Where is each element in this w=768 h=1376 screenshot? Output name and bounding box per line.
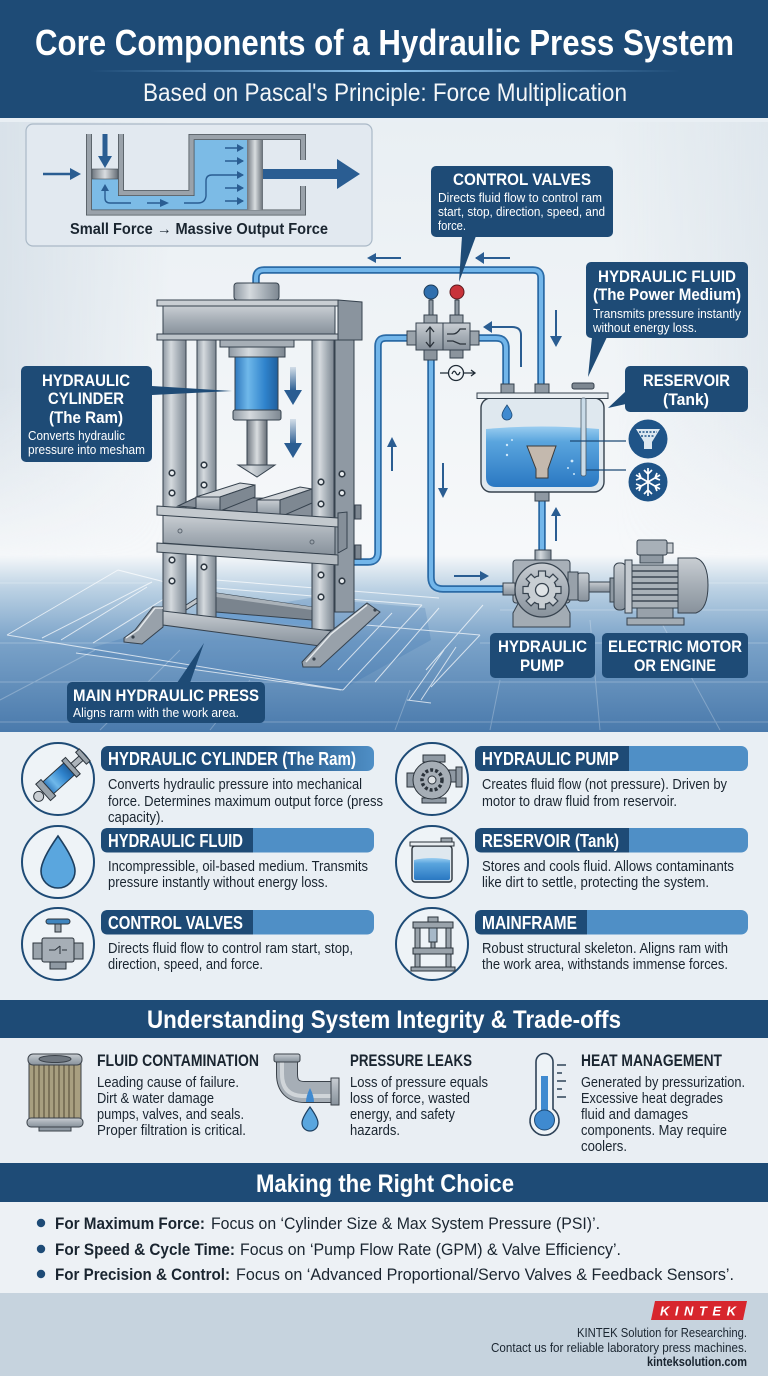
icon: thermometer bbox=[530, 1054, 566, 1135]
rear rail bbox=[216, 612, 312, 626]
callout: hydraulic fluid: Transmits pressure instantly bbox=[593, 306, 741, 321]
item: fluid contamination: Proper filtration is critical. bbox=[97, 1123, 246, 1139]
item: fluid contamination: Leading cause of failure. bbox=[97, 1075, 239, 1091]
card: hydraulic pump: motor to draw fluid from reservoir. bbox=[482, 794, 677, 810]
column holes bbox=[169, 462, 345, 600]
base and feet bbox=[163, 611, 332, 646]
card: reservoir bbox=[396, 826, 748, 898]
label: electric motor: ELECTRIC MOTOR bbox=[608, 637, 742, 656]
card: mainframe: Robust structural skeleton. Aligns ram with bbox=[482, 941, 728, 957]
footer text: KINTEK Solution for Researching. bbox=[577, 1326, 747, 1340]
card: mainframe bbox=[396, 908, 748, 980]
header banner bbox=[0, 0, 768, 118]
callout: hydraulic cylinder bbox=[21, 366, 232, 462]
item: pressure leaks: Loss of pressure equals bbox=[350, 1075, 488, 1091]
card: hydraulic cylinder: force. Determines maximum output force (press bbox=[108, 794, 383, 810]
card: hydraulic fluid bbox=[22, 826, 374, 898]
hydraulic press frame bbox=[124, 283, 380, 667]
card: hydraulic fluid: HYDRAULIC FLUID bbox=[108, 831, 243, 851]
icon: tank bbox=[410, 838, 454, 882]
card: reservoir: RESERVOIR (Tank) bbox=[482, 831, 619, 851]
top beam bbox=[234, 283, 279, 300]
item: pressure leaks: energy, and safety bbox=[350, 1107, 456, 1123]
footer text: kinteksolution.com bbox=[647, 1355, 747, 1369]
icon: cylinder bbox=[28, 747, 92, 808]
callout: control valves bbox=[431, 166, 613, 282]
press bed top surface bbox=[178, 497, 312, 518]
section band: system integrity bbox=[0, 1000, 768, 1038]
card: hydraulic pump: Creates fluid flow (not pressure). Driven by bbox=[482, 777, 728, 793]
hydraulic pump bbox=[503, 550, 589, 627]
panel: trade-offs bbox=[0, 1038, 768, 1163]
reservoir tank bbox=[477, 383, 668, 502]
callout: reservoir: (Tank) bbox=[663, 390, 709, 409]
icon: pump bbox=[407, 755, 462, 803]
footer text bbox=[491, 1326, 747, 1369]
card: hydraulic pump: HYDRAULIC PUMP bbox=[482, 749, 619, 769]
logo: KINTEK: KINTEK bbox=[660, 1304, 738, 1318]
bullet: precision and control bbox=[37, 1265, 734, 1284]
card: control valves: direction, speed, and force. bbox=[108, 957, 263, 973]
item: heat management bbox=[530, 1052, 745, 1155]
icon: leaking pipe bbox=[274, 1054, 339, 1131]
pipes bbox=[256, 270, 542, 589]
bullet: maximum force: Focus on ‘Cylinder Size & Max System Pressure (PSI)’. bbox=[211, 1214, 600, 1233]
card: hydraulic fluid: Incompressible, oil-based medium. Transmits bbox=[108, 859, 368, 875]
press bed bbox=[355, 505, 361, 519]
item: heat management: Generated by pressurization. bbox=[581, 1075, 745, 1091]
callout: hydraulic fluid: HYDRAULIC FLUID bbox=[598, 267, 736, 286]
blueprint floor bbox=[0, 570, 768, 730]
card: control valves bbox=[22, 908, 374, 980]
item: heat management: components. May require bbox=[581, 1123, 727, 1139]
callout: hydraulic cylinder: Converts hydraulic bbox=[28, 428, 125, 443]
card: control valves: CONTROL VALVES bbox=[108, 913, 243, 933]
flow arrows bbox=[105, 148, 243, 203]
callout: main hydraulic press: Aligns rarm with the work area. bbox=[73, 705, 239, 720]
input arrows bbox=[43, 173, 72, 175]
logo: KINTEK bbox=[651, 1301, 747, 1320]
card: hydraulic cylinder: Converts hydraulic pressure into mechanical bbox=[108, 777, 362, 793]
callout: hydraulic cylinder: CYLINDER bbox=[48, 389, 124, 408]
footer text: Contact us for reliable laboratory press machines. bbox=[491, 1341, 747, 1355]
callout: hydraulic fluid: (The Power Medium) bbox=[593, 285, 741, 304]
card: hydraulic pump bbox=[396, 743, 748, 815]
callout: hydraulic fluid bbox=[586, 262, 748, 377]
label: hydraulic pump: PUMP bbox=[520, 656, 564, 675]
item: pressure leaks: loss of force, wasted bbox=[350, 1091, 470, 1107]
card: hydraulic cylinder: capacity). bbox=[108, 810, 164, 826]
columns bbox=[197, 340, 216, 618]
item: pressure leaks: hazards. bbox=[350, 1123, 400, 1139]
hydraulic cylinder bbox=[220, 340, 294, 477]
card: hydraulic fluid: pressure instantly without energy loss. bbox=[108, 875, 328, 891]
diagram caption: Small Force → Massive Output Force bbox=[70, 221, 328, 238]
callout: main hydraulic press: MAIN HYDRAULIC PRESS bbox=[73, 686, 259, 705]
valve manifold bbox=[407, 285, 479, 380]
icon: frame bbox=[411, 917, 455, 971]
label: hydraulic pump: HYDRAULIC bbox=[498, 637, 587, 656]
ram direction arrows bbox=[284, 367, 302, 458]
flow symbol bbox=[440, 366, 475, 380]
section band: system integrity: Understanding System Integrity & Trade-offs bbox=[147, 1006, 621, 1034]
callout: hydraulic cylinder: HYDRAULIC bbox=[42, 371, 130, 390]
work blocks bbox=[196, 483, 312, 517]
icon: filter bbox=[628, 420, 668, 458]
callout: control valves: Directs fluid flow to control ram bbox=[438, 190, 602, 205]
callout: main hydraulic press bbox=[67, 643, 265, 723]
panel: right choice list bbox=[0, 1202, 768, 1293]
icon: snowflake bbox=[628, 462, 668, 502]
label: electric motor bbox=[602, 633, 748, 678]
icon: drop bbox=[41, 836, 75, 888]
card: hydraulic cylinder: HYDRAULIC CYLINDER (The Ram) bbox=[108, 749, 356, 769]
card: control valves: Directs fluid flow to control ram start, stop, bbox=[108, 941, 353, 957]
item: pressure leaks bbox=[274, 1052, 488, 1139]
leader lines bbox=[570, 441, 626, 470]
subtitle: Based on Pascal's Principle: Force Multiplication bbox=[143, 79, 627, 107]
item: fluid contamination: FLUID CONTAMINATION bbox=[97, 1052, 259, 1070]
card: mainframe: the work area, withstands immense forces. bbox=[482, 957, 728, 973]
item: fluid contamination bbox=[27, 1052, 259, 1139]
panel: component cards bbox=[0, 732, 768, 1000]
item: heat management: coolers. bbox=[581, 1139, 627, 1155]
pump gear bbox=[523, 571, 561, 609]
section band: right choice bbox=[0, 1163, 768, 1202]
callout: control valves: force. bbox=[438, 218, 466, 233]
footer bbox=[0, 1293, 768, 1376]
card: hydraulic cylinder bbox=[22, 743, 383, 826]
item: fluid contamination: pumps, valves, and seals. bbox=[97, 1107, 244, 1123]
card: reservoir: Stores and cools fluid. Allows contaminants bbox=[482, 859, 734, 875]
section band: right choice: Making the Right Choice bbox=[256, 1170, 514, 1198]
panel: main system diagram bbox=[0, 122, 768, 732]
callout: hydraulic cylinder: pressure into mesham bbox=[28, 442, 145, 457]
icon: filter cartridge bbox=[27, 1054, 83, 1131]
callout: hydraulic cylinder: (The Ram) bbox=[49, 408, 123, 427]
item: fluid contamination: Dirt & water damage bbox=[97, 1091, 214, 1107]
icon: valve bbox=[33, 919, 83, 969]
callout: reservoir bbox=[608, 366, 748, 412]
item: heat management: fluid and damages bbox=[581, 1107, 688, 1123]
bullet: precision and control: For Precision & Control: bbox=[55, 1265, 230, 1284]
label: hydraulic pump bbox=[490, 633, 595, 678]
drop bbox=[502, 405, 512, 420]
electric motor bbox=[589, 540, 708, 625]
internal strainer bbox=[527, 446, 556, 478]
bullet: maximum force: For Maximum Force: bbox=[55, 1214, 205, 1233]
card: mainframe: MAINFRAME bbox=[482, 913, 577, 933]
bullet: speed and cycle time: For Speed & Cycle Time: bbox=[55, 1240, 235, 1259]
callout: control valves: start, stop, direction, speed, and bbox=[438, 204, 605, 219]
panel: Pascal principle diagram bbox=[26, 124, 372, 246]
card: reservoir: like dirt to settle, protecting the system. bbox=[482, 875, 709, 891]
label: electric motor: OR ENGINE bbox=[634, 656, 716, 675]
callout: control valves: CONTROL VALVES bbox=[453, 170, 591, 189]
callout: reservoir: RESERVOIR bbox=[643, 371, 730, 390]
bullet: precision and control: Focus on ‘Advanced Proportional/Servo Valves & Feedback Sensors’. bbox=[236, 1265, 734, 1284]
fluid bbox=[92, 140, 248, 210]
vessel walls bbox=[89, 134, 303, 212]
small piston bbox=[92, 169, 118, 179]
item: pressure leaks: PRESSURE LEAKS bbox=[350, 1052, 472, 1070]
bullet: speed and cycle time bbox=[37, 1240, 621, 1259]
large piston and output arrow bbox=[247, 140, 263, 210]
item: heat management: Excessive heat degrades bbox=[581, 1091, 723, 1107]
bullet: maximum force bbox=[37, 1214, 600, 1233]
flow arrows along pipes bbox=[367, 252, 562, 581]
item: heat management: HEAT MANAGEMENT bbox=[581, 1052, 722, 1070]
callout: hydraulic fluid: without energy loss. bbox=[592, 320, 697, 335]
return tube bbox=[581, 398, 586, 476]
bullet: speed and cycle time: Focus on ‘Pump Flow Rate (GPM) & Valve Efficiency’. bbox=[240, 1240, 621, 1259]
